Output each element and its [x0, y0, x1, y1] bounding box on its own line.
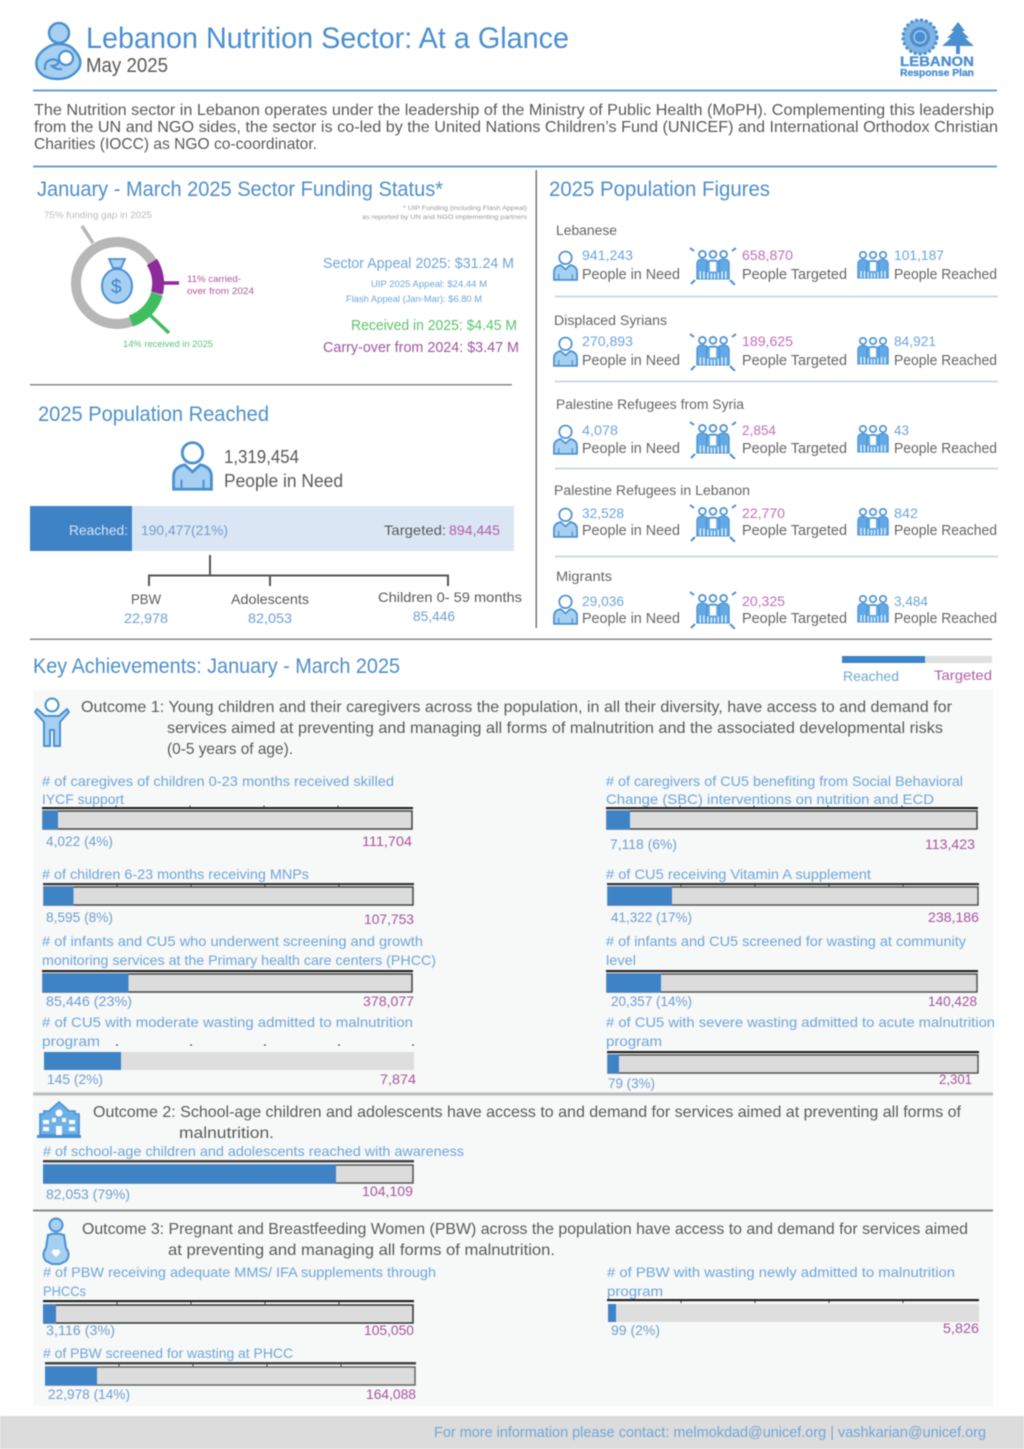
- funding figures: Carry-over from 2024: $3.47 M: [323, 339, 519, 356]
- funding figures: Sector Appeal 2025: $31.24 M: [323, 255, 514, 272]
- footnote: [362, 205, 528, 221]
- indicator: MMS/IFA: # of PBW receiving adequate MMS/ IFA supplements through: [43, 1264, 436, 1280]
- intro paragraph: The Nutrition sector in Lebanon operates under the leadership of the Ministry of Public Health (MoPH). Complementing this leadership: [34, 102, 994, 119]
- indicator: severe wasting: 2,301: [939, 1072, 972, 1087]
- row: Lebanese: People Reached: [894, 267, 997, 283]
- logo: Lebanon Response Plan: [900, 20, 974, 79]
- indicator: PBW screening: # of PBW screened for wasting at PHCC: [43, 1345, 293, 1361]
- indicator: caregivers SBC: [606, 773, 978, 852]
- indicator: children MNPs: 107,753: [364, 912, 414, 927]
- indicator: caregivers SBC: 113,423: [925, 837, 975, 852]
- indicator: caregivers IYCF: 111,704: [362, 834, 413, 849]
- indicator: PBW screening: 22,978 (14%): [48, 1387, 130, 1402]
- donut chart: [76, 226, 179, 333]
- row: Palestine Refugees in Lebanon: [554, 483, 997, 542]
- row: Displaced Syrians: [554, 313, 997, 371]
- indicator: caregivers SBC: Change (SBC) interventions on nutrition and ECD: [606, 791, 934, 807]
- people in need: [224, 447, 343, 491]
- row: Displaced Syrians: People Reached: [894, 353, 997, 369]
- row: Palestine Refugees from Syria: People in Need: [582, 441, 680, 457]
- reached bar: Targeted:: [384, 522, 446, 538]
- row: Lebanese: People Targeted: [742, 267, 847, 283]
- title: Lebanon Nutrition Sector: At a Glance: [86, 22, 569, 55]
- outcome 2 statement: malnutrition.: [179, 1125, 274, 1142]
- row: Migrants: 29,036: [582, 593, 624, 609]
- panel: outcome 1: [35, 698, 995, 1091]
- row: Migrants: People in Need: [582, 611, 680, 627]
- funding figures: [323, 255, 519, 356]
- row: Displaced Syrians: People in Need: [582, 353, 680, 369]
- funding figures: Received in 2025: $4.45 M: [351, 317, 517, 334]
- outcome 2 statement: [93, 1104, 962, 1142]
- footnote: * UIP Funding (including Flash Appeal): [403, 205, 527, 212]
- indicator: community screening: 140,428: [928, 994, 977, 1009]
- indicator: screening PHCC: [42, 933, 436, 1009]
- breakdown: PBW: [124, 591, 168, 626]
- indicator: screening PHCC: 378,077: [363, 994, 414, 1009]
- row: Lebanese: People in Need: [582, 267, 680, 283]
- indicator: community screening: # of infants and CU5 screened for wasting at community: [606, 933, 966, 949]
- indicator: MMS/IFA: [43, 1264, 436, 1338]
- row: Migrants: People Targeted: [742, 611, 847, 627]
- callout: carried over: over from 2024: [187, 286, 254, 296]
- indicator: community screening: [606, 933, 978, 1009]
- footnote: as reported by UN and NGO implementing partners: [362, 214, 528, 221]
- intro paragraph: from the UN and NGO sides, the sector is co-led by the United Nations Children’s Fund (UNICEF) and International Orthodox Christian: [34, 119, 998, 136]
- breakdown: adolescents: [231, 591, 309, 626]
- indicator: moderate wasting: 145 (2%): [47, 1072, 103, 1087]
- row: Palestine Refugees in Lebanon: 32,528: [582, 505, 624, 521]
- icon: money bag: $: [111, 277, 122, 298]
- callout: funding gap: 75% funding gap in 2025: [44, 210, 152, 220]
- legend: Targeted: [934, 667, 992, 683]
- outcome 1 statement: [81, 699, 953, 758]
- row: Displaced Syrians: Displaced Syrians: [554, 313, 667, 328]
- date: May 2025: [86, 55, 168, 77]
- outcome 2 statement: Outcome 2: School-age children and adolescents have access to and demand for services aimed at preventing all forms of: [93, 1104, 962, 1121]
- row: Migrants: Migrants: [556, 569, 612, 584]
- reached bar: 894,445: [449, 522, 500, 538]
- row: Migrants: 20,325: [742, 593, 785, 609]
- outcome 1 statement: Outcome 1: Young children and their caregivers across the population, in all their diversity, have access to and demand for: [81, 699, 953, 716]
- row: Displaced Syrians: People Targeted: [742, 353, 847, 369]
- row: Displaced Syrians: 84,921: [894, 333, 936, 349]
- row: Palestine Refugees from Syria: 2,854: [742, 422, 776, 438]
- icon: mother and baby: [36, 23, 80, 79]
- indicator: caregivers SBC: # of caregivers of CU5 benefiting from Social Behavioral: [606, 773, 963, 789]
- row: Displaced Syrians: 189,625: [742, 333, 793, 349]
- indicator: severe wasting: [606, 1014, 995, 1091]
- panel: population figures: [549, 178, 998, 629]
- funding figures: UIP 2025 Appeal: $24.44 M: [371, 279, 487, 289]
- indicator: school-age awareness: 104,109: [362, 1184, 413, 1199]
- row: Lebanese: 658,870: [742, 247, 793, 263]
- legend: [842, 656, 992, 684]
- intro paragraph: Charities (IOCC) as NGO co-coordinator.: [34, 136, 317, 153]
- indicator: screening PHCC: 85,446 (23%): [46, 994, 132, 1009]
- outcome 3 statement: Outcome 3: Pregnant and Breastfeeding Women (PBW) across the population have access to and demand for services aimed: [82, 1221, 968, 1238]
- indicator: school-age awareness: # of school-age children and adolescents reached with awareness: [43, 1143, 464, 1159]
- outcome 3 statement: [82, 1221, 968, 1259]
- heading: population figures: 2025 Population Figures: [549, 178, 770, 201]
- row: Palestine Refugees from Syria: Palestine Refugees from Syria: [556, 397, 744, 412]
- row: Palestine Refugees from Syria: [554, 397, 997, 459]
- icon: school: [37, 1102, 81, 1138]
- indicator: children MNPs: 8,595 (8%): [46, 910, 113, 925]
- indicator: MMS/IFA: 3,116 (3%): [46, 1323, 115, 1338]
- indicator: children MNPs: # of children 6-23 months receiving MNPs: [42, 866, 309, 882]
- footer: For more information please contact: melmokdad@unicef.org | vashkarian@unicef.org: [434, 1425, 986, 1441]
- indicator: moderate wasting: # of CU5 with moderate wasting admitted to malnutrition: [42, 1014, 413, 1030]
- breakdown: children: 85,446: [413, 608, 455, 624]
- row: Lebanese: [554, 223, 997, 285]
- indicator: PBW wasting admitted: [607, 1264, 979, 1338]
- indicator: community screening: level: [606, 952, 636, 968]
- funding figures: Flash Appeal (Jan-Mar): $6.80 M: [346, 294, 482, 304]
- indicator: caregivers IYCF: # of caregives of children 0-23 months received skilled: [42, 773, 394, 789]
- logo: Lebanon Response Plan: LEBANON: [900, 53, 974, 69]
- breakdown: children: Children 0- 59 months: [378, 589, 522, 605]
- heading: population reached: 2025 Population Reached: [38, 403, 269, 426]
- indicator: vitamin A: # of CU5 receiving Vitamin A supplement: [606, 866, 871, 882]
- indicator: moderate wasting: 7,874: [380, 1072, 417, 1087]
- indicator: MMS/IFA: PHCCs: [43, 1283, 86, 1299]
- row: Palestine Refugees from Syria: 4,078: [582, 422, 618, 438]
- row: Migrants: [554, 569, 997, 629]
- panel: outcome 2: [37, 1102, 962, 1202]
- panel: population reached: [30, 403, 522, 626]
- breakdown connector: [149, 555, 448, 586]
- panel: achievements background: [33, 690, 993, 1406]
- outcome 3 statement: at preventing and managing all forms of malnutrition.: [168, 1242, 555, 1259]
- logo: Lebanon Response Plan: Response Plan: [900, 68, 974, 79]
- indicator: community screening: 20,357 (14%): [611, 994, 692, 1009]
- indicator: severe wasting: 79 (3%): [608, 1076, 655, 1091]
- breakdown: adolescents: 82,053: [248, 610, 292, 626]
- footer: [0, 1416, 1024, 1449]
- row: Palestine Refugees in Lebanon: People Reached: [894, 523, 997, 539]
- outcome 1 statement: (0-5 years of age).: [167, 741, 293, 758]
- people in need: People in Need: [224, 471, 343, 491]
- row: Palestine Refugees from Syria: People Reached: [894, 441, 997, 457]
- heading: key achievements: Key Achievements: January - March 2025: [33, 655, 400, 678]
- breakdown: children: [378, 589, 522, 624]
- breakdown: PBW: 22,978: [124, 610, 168, 626]
- indicator: PBW wasting admitted: 5,826: [943, 1321, 979, 1336]
- row: Palestine Refugees in Lebanon: 842: [894, 505, 918, 521]
- indicator: school-age awareness: [43, 1143, 464, 1202]
- reached bar: Reached:: [69, 522, 128, 538]
- row: Lebanese: 101,187: [894, 247, 944, 263]
- indicator: PBW wasting admitted: program: [607, 1283, 663, 1299]
- indicator: vitamin A: 41,322 (17%): [611, 910, 692, 925]
- indicator: vitamin A: [606, 866, 979, 925]
- indicator: screening PHCC: # of infants and CU5 who underwent screening and growth: [42, 933, 423, 949]
- indicator: severe wasting: program: [606, 1033, 662, 1049]
- row: Palestine Refugees in Lebanon: People Targeted: [742, 523, 847, 539]
- outcome 1 statement: services aimed at preventing and managing all forms of malnutrition and the associated developmental risks: [167, 720, 943, 737]
- row: Migrants: People Reached: [894, 611, 997, 627]
- row: Palestine Refugees in Lebanon: People in Need: [582, 523, 680, 539]
- legend: Reached: [843, 668, 899, 684]
- indicator: caregivers IYCF: IYCF support: [42, 791, 124, 807]
- indicator: vitamin A: 238,186: [928, 910, 979, 925]
- heading: funding status: January - March 2025 Sector Funding Status*: [37, 178, 443, 201]
- callout: received: 14% received in 2025: [123, 339, 213, 349]
- reached bar: 190,477(21%): [141, 522, 228, 538]
- panel: funding status: [37, 178, 528, 356]
- panel: outcome 3: [43, 1218, 979, 1402]
- indicator: PBW screening: [43, 1345, 416, 1402]
- indicator: PBW wasting admitted: # of PBW with wasting newly admitted to malnutrition: [607, 1264, 955, 1280]
- icon: pregnant woman: [44, 1218, 68, 1264]
- indicator: moderate wasting: [42, 1014, 417, 1087]
- row: Lebanese: Lebanese: [556, 223, 617, 238]
- indicator: caregivers IYCF: 4,022 (4%): [46, 834, 113, 849]
- row: Palestine Refugees in Lebanon: 22,770: [742, 505, 785, 521]
- indicator: school-age awareness: 82,053 (79%): [46, 1187, 130, 1202]
- icon: child: [35, 698, 69, 746]
- row: Migrants: 3,484: [894, 593, 928, 609]
- reached bar: [30, 506, 514, 551]
- indicator: severe wasting: # of CU5 with severe wasting admitted to acute malnutrition: [606, 1014, 995, 1030]
- row: Lebanese: 941,243: [582, 247, 633, 263]
- indicator: caregivers IYCF: [42, 773, 413, 849]
- callout: carried over: [187, 274, 254, 296]
- indicator: PBW wasting admitted: 99 (2%): [611, 1323, 660, 1338]
- people in need: 1,319,454: [224, 447, 299, 467]
- callout: carried over: 11% carried-: [187, 274, 241, 284]
- row: Palestine Refugees from Syria: People Targeted: [742, 441, 847, 457]
- indicator: moderate wasting: program: [42, 1033, 100, 1049]
- indicator: caregivers SBC: 7,118 (6%): [610, 837, 677, 852]
- header: [36, 20, 974, 79]
- indicator: screening PHCC: monitoring services at the Primary health care centers (PHCC): [42, 952, 436, 968]
- indicator: PBW screening: 164,088: [366, 1387, 416, 1402]
- row: Palestine Refugees in Lebanon: Palestine Refugees in Lebanon: [554, 483, 750, 498]
- intro paragraph: [34, 102, 998, 153]
- breakdown: PBW: PBW: [131, 591, 162, 607]
- indicator: children MNPs: [42, 866, 414, 927]
- row: Palestine Refugees from Syria: 43: [894, 422, 909, 438]
- icon: person: [174, 443, 211, 489]
- row: Displaced Syrians: 270,893: [582, 333, 633, 349]
- indicator: MMS/IFA: 105,050: [364, 1323, 414, 1338]
- breakdown: adolescents: Adolescents: [231, 591, 309, 607]
